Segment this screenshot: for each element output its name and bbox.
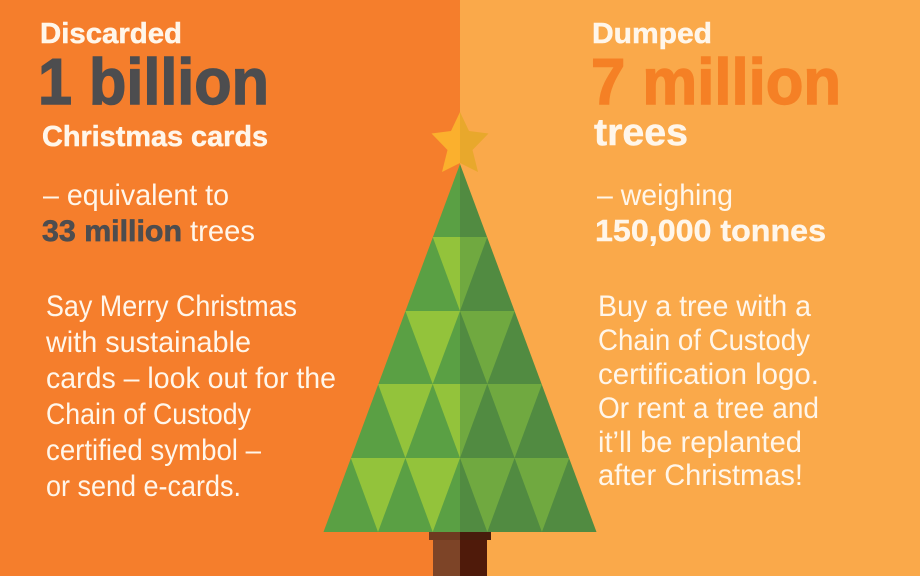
text block: left advice: Chain of Custody <box>46 398 251 431</box>
big number: 7 million: 7 million <box>591 45 841 118</box>
text block: left advice: cards – look out for the <box>46 362 336 395</box>
panel: left background <box>0 0 460 576</box>
light triangles, left <box>351 237 460 532</box>
text block: left advice: Say Merry Christmas <box>46 290 297 323</box>
text block: right advice: Buy a tree with a <box>598 290 811 323</box>
text block: left advice: with sustainable <box>45 326 251 359</box>
text block: right advice: certification logo. <box>598 358 819 391</box>
heading: trees: trees <box>594 112 688 154</box>
light triangles, right <box>460 237 569 532</box>
text: equivalent to: – equivalent to <box>43 179 229 212</box>
text block: left advice: certified symbol – <box>46 434 261 467</box>
panel: right background <box>460 0 920 576</box>
text block: left advice: or send e-cards. <box>46 470 241 503</box>
tree trunk <box>429 532 491 576</box>
text: 33 million trees: 33 million <box>42 215 182 248</box>
tree right half <box>460 164 596 532</box>
heading: Christmas cards: Christmas cards <box>42 121 268 153</box>
text block: right advice: Or rent a tree and <box>598 392 819 425</box>
text: weighing: – weighing <box>597 179 733 212</box>
text block: left advice <box>45 290 336 503</box>
heading: Discarded: Discarded <box>40 18 182 50</box>
text: 150,000 tonnes: 150,000 tonnes <box>595 213 826 248</box>
icon: star <box>432 112 488 172</box>
text block: right advice <box>598 290 819 492</box>
text: 33 million trees: trees <box>190 215 255 248</box>
text: 33 million trees <box>42 215 255 248</box>
text block: right advice: Chain of Custody <box>598 324 810 357</box>
heading: Dumped: Dumped <box>592 18 712 50</box>
big number: 1 billion: 1 billion <box>38 45 269 118</box>
icon: Christmas tree <box>324 112 596 576</box>
text block: right advice: after Christmas! <box>598 459 803 492</box>
text block: right advice: it’ll be replanted <box>598 426 802 459</box>
tree left half <box>324 164 460 532</box>
